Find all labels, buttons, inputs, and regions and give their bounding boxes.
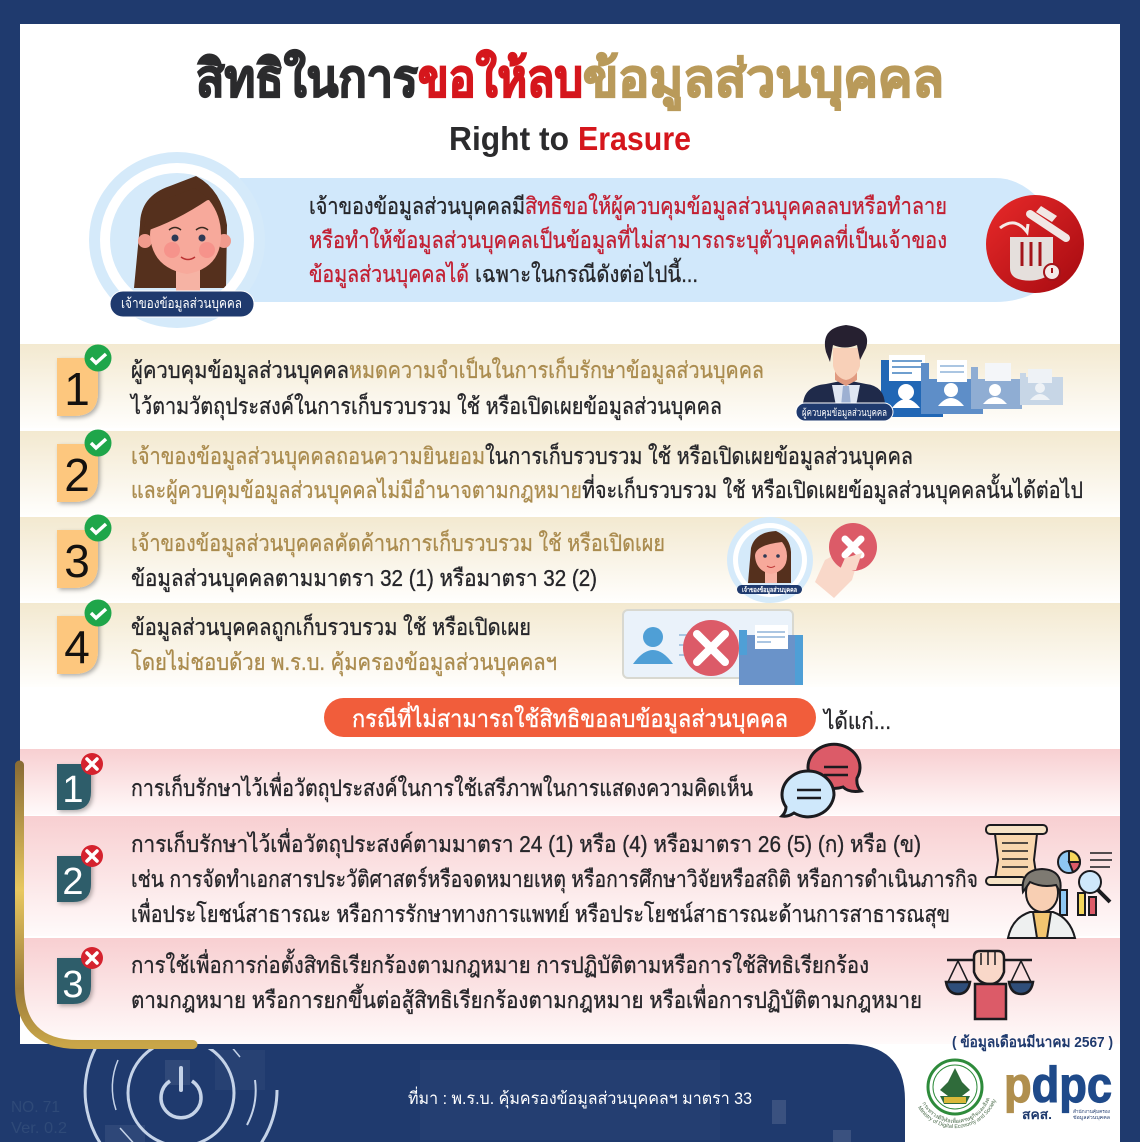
condition 2	[57, 430, 1083, 504]
exception 2	[57, 825, 1112, 938]
badge x1	[57, 753, 103, 811]
band: condition row 4	[20, 603, 1120, 687]
icon: folders	[881, 355, 1063, 417]
band: exception row 2	[20, 816, 1120, 936]
text x2: เช่น การจัดทำเอกสารประวัติศาสตร์หรือจดหมายเหตุ หรือการศึกษาวิจัยหรือสถิติ หรือการดำเนินภารกิจ	[131, 866, 978, 893]
condition 3	[57, 514, 877, 603]
footer navy panel	[0, 1040, 905, 1142]
badge x2	[57, 845, 103, 903]
text x2	[131, 828, 978, 928]
version note	[11, 1099, 67, 1137]
text 4: ข้อมูลส่วนบุคคลถูกเก็บรวบรวม ใช้ หรือเปิดเผย	[131, 612, 531, 641]
intro text: สิทธิขอให้ผู้ควบคุมข้อมูลส่วนบุคคลลบหรือทำลาย	[525, 193, 947, 220]
condition 1	[57, 325, 1063, 421]
text 1: ผู้ควบคุมข้อมูลส่วนบุคคล	[131, 357, 349, 384]
text x2: เพื่อประโยชน์สาธารณะ หรือการรักษาทางการแพทย์ หรือประโยชน์สาธารณะด้านการสาธารณสุข	[131, 898, 950, 928]
subtitle: Right to	[449, 120, 569, 157]
trailing text: ได้แก่...	[822, 708, 891, 734]
intro text: เจ้าของข้อมูลส่วนบุคคลมี	[309, 193, 525, 220]
text 4	[131, 612, 557, 676]
callout: exceptions heading	[324, 698, 891, 737]
icon: justice fist and scales	[946, 951, 1033, 1019]
badge x3	[57, 947, 103, 1006]
text x2: การเก็บรักษาไว้เพื่อวัตถุประสงค์ตามมาตรา 24 (1) หรือ (4) หรือมาตรา 26 (5) (ก) หรือ (ข)	[131, 828, 921, 858]
text 2: เจ้าของข้อมูลส่วนบุคคลถอนความยินยอม	[131, 443, 485, 470]
band: condition row 2	[20, 431, 1120, 515]
text 1	[129, 355, 764, 420]
text x3: ตามกฎหมาย หรือการยกขึ้นต่อสู้สิทธิเรียกร้องตามกฎหมาย หรือเพื่อการปฏิบัติตามกฎหมาย	[131, 984, 922, 1014]
exception 1	[57, 744, 861, 817]
logo: PDPC: สคส.	[1022, 1107, 1052, 1122]
text x3	[131, 949, 922, 1014]
text x3: การใช้เพื่อการก่อตั้งสิทธิเรียกร้องตามกฎหมาย การปฏิบัติตามหรือการใช้สิทธิเรียกร้อง	[131, 949, 869, 978]
source text: ที่มา : พ.ร.บ. คุ้มครองข้อมูลส่วนบุคคลฯ มาตรา 33	[408, 1086, 752, 1109]
label pill: เจ้าของข้อมูลส่วนบุคคล	[121, 295, 242, 312]
label pill	[110, 291, 254, 317]
band: condition row 3	[20, 517, 1120, 601]
badge x3: 3	[62, 964, 84, 1006]
band: exception row 1	[20, 749, 1120, 815]
text 2: ในการเก็บรวบรวม ใช้ หรือเปิดเผยข้อมูลส่วนบุคคล	[485, 441, 913, 470]
icon: small avatar	[727, 517, 813, 603]
title: สิทธิในการ	[196, 49, 419, 107]
badge x1: 1	[62, 769, 84, 811]
badge 4: 4	[64, 621, 90, 673]
panel: intro definition	[89, 152, 1084, 328]
badge 3: 3	[64, 535, 90, 587]
logo: PDPC: สำนักงานคุ้มครอง	[1073, 1108, 1110, 1115]
text 1: หมดความจำเป็นในการเก็บรักษาข้อมูลส่วนบุคคล	[349, 355, 764, 384]
version note: NO. 71	[11, 1099, 60, 1116]
avatar: data subject	[89, 152, 265, 328]
band: exception row 3	[20, 938, 1120, 1044]
version note: Ver. 0.2	[11, 1120, 67, 1137]
text 4: โดยไม่ชอบด้วย พ.ร.บ. คุ้มครองข้อมูลส่วนบุคคลฯ	[131, 649, 557, 676]
badge 3	[57, 514, 112, 588]
icon: small avatar: เจ้าของข้อมูลส่วนบุคคล	[742, 585, 797, 595]
icon: speech bubbles	[782, 744, 861, 817]
band: condition row 1	[20, 344, 1120, 428]
logo: ministry emblem: Ministry of Digital Economy and Society	[918, 1098, 996, 1128]
title	[196, 49, 944, 111]
text 2	[131, 441, 1083, 504]
badge x2: 2	[62, 861, 84, 903]
logo: ministry emblem: กระทรวงดิจิทัลเพื่อเศรษฐกิจและสังคม	[922, 1098, 990, 1123]
orange pill: กรณีที่ไม่สามารถใช้สิทธิขอลบข้อมูลส่วนบุคคล	[352, 702, 788, 734]
badge 4	[57, 600, 112, 674]
badge 2	[57, 430, 112, 502]
title: ขอให้ลบ	[418, 49, 583, 107]
subtitle: Erasure	[578, 120, 691, 157]
logo: PDPC: ข้อมูลส่วนบุคคล	[1073, 1115, 1110, 1121]
title: ข้อมูลส่วนบุคคล	[583, 50, 944, 111]
text 1: ไว้ตามวัตถุประสงค์ในการเก็บรวบรวม ใช้ หรือเปิดเผยข้อมูลส่วนบุคคล	[129, 391, 722, 420]
text 3: ข้อมูลส่วนบุคคลตามมาตรา 32 (1) หรือมาตรา 32 (2)	[131, 565, 597, 592]
badge 2: 2	[64, 449, 90, 501]
data date note: ( ข้อมูลเดือนมีนาคม 2567 )	[952, 1034, 1113, 1052]
subtitle	[449, 120, 691, 157]
intro text: เฉพาะในกรณีดังต่อไปนี้...	[475, 258, 698, 287]
orange pill	[324, 698, 816, 737]
intro band	[240, 178, 1040, 302]
badge 1: 1	[64, 363, 90, 415]
text 3	[131, 528, 665, 592]
icon: power rings	[85, 1040, 277, 1142]
controller label: ผู้ควบคุมข้อมูลส่วนบุคคล	[802, 407, 887, 419]
logo: PDPC: pdpc	[1004, 1057, 1112, 1113]
condition 4	[57, 600, 803, 685]
text x1: การเก็บรักษาไว้เพื่อวัตถุประสงค์ในการใช้เสรีภาพในการแสดงความคิดเห็น	[131, 772, 753, 802]
icon: hand pressing x	[815, 523, 877, 598]
icon: id card with x and folder	[623, 610, 803, 685]
intro text	[309, 193, 947, 288]
icon: data controller	[796, 325, 893, 421]
gold corner frame	[20, 765, 193, 1044]
icon: red trash	[986, 195, 1084, 293]
badge 1	[57, 344, 112, 416]
text 2: และผู้ควบคุมข้อมูลส่วนบุคคลไม่มีอำนาจตามกฎหมาย	[131, 477, 582, 504]
icon: scroll, charts and doctor	[986, 825, 1112, 938]
text 3: เจ้าของข้อมูลส่วนบุคคลคัดค้านการเก็บรวบรวม ใช้ หรือเปิดเผย	[131, 528, 665, 557]
intro text: ข้อมูลส่วนบุคคลได้	[309, 261, 469, 288]
exception 3	[57, 947, 1033, 1019]
intro text: หรือทำให้ข้อมูลส่วนบุคคลเป็นข้อมูลที่ไม่สามารถระบุตัวบุคคลที่เป็นเจ้าของ	[309, 224, 947, 254]
